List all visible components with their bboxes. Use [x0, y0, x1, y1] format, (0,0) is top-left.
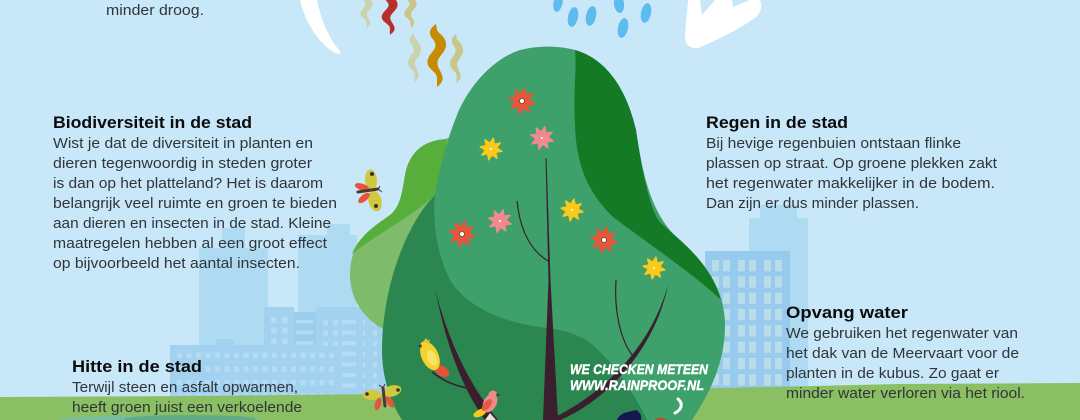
website call to action — [570, 361, 709, 393]
raindrops — [552, 0, 653, 39]
text block: biodiversiteit: Wist je dat de diversiteit in planten en — [53, 136, 313, 152]
text block: opvang water: het dak van de Meervaart voor de — [786, 346, 1019, 362]
yellow bird — [416, 338, 451, 380]
text block: regen: het regenwater makkelijker in de bodem. — [706, 176, 995, 192]
butterfly bottom — [362, 383, 403, 411]
pink bird — [472, 390, 500, 420]
text block: hitte: Terwijl steen en asfalt opwarmen, — [72, 380, 298, 396]
tree crown — [350, 47, 725, 420]
text block: regen — [706, 114, 997, 212]
text block: regen: plassen op straat. Op groene plekken zakt — [706, 156, 997, 172]
skyline right — [705, 205, 808, 395]
text block: biodiversiteit: belangrijk veel ruimte en groen te bieden — [53, 196, 337, 212]
text block: opvang water — [786, 304, 1025, 402]
smoke waves — [360, 0, 463, 87]
flowers — [447, 86, 667, 281]
text block: biodiversiteit — [53, 114, 337, 272]
figure tops at bottom of tree — [617, 399, 681, 420]
white cloud left — [300, 0, 340, 54]
text block: regen: Dan zijn er dus minder plassen. — [706, 196, 919, 212]
text block: opvang water: planten in de kubus. Zo gaat er — [786, 366, 999, 382]
text block: biodiversiteit: maatregelen hebben al een groot effect — [53, 236, 327, 252]
text block: opvang water: Opvang water — [786, 304, 909, 322]
text block: hitte: heeft groen juist een verkoelende — [72, 400, 302, 416]
skyline left — [170, 224, 390, 400]
text block: regen: Regen in de stad — [706, 114, 848, 132]
text block: biodiversiteit: is dan op het platteland? Het is daarom — [53, 176, 323, 192]
text fragment top left: minder droog. — [106, 3, 204, 19]
butterfly top — [354, 169, 384, 213]
text block: biodiversiteit: aan dieren en insecten in de stad. Kleine — [53, 216, 331, 232]
tree trunk and branches — [432, 158, 668, 420]
text block: opvang water: We gebruiken het regenwater van — [786, 326, 1018, 342]
text block: hitte: Hitte in de stad — [72, 358, 202, 376]
website call to action: WWW.RAINPROOF.NL — [570, 377, 704, 393]
website call to action: WE CHECKEN METEEN — [570, 361, 709, 377]
text block: hitte — [72, 358, 302, 416]
pond shadow — [60, 415, 260, 420]
text block: biodiversiteit: op bijvoorbeeld het aantal insecten. — [53, 256, 300, 272]
text block: biodiversiteit: dieren tegenwoordig in steden groter — [53, 156, 312, 172]
text block: regen: Bij hevige regenbuien ontstaan flinke — [706, 136, 961, 152]
ground — [0, 383, 1080, 420]
text block: biodiversiteit: Biodiversiteit in de stad — [53, 114, 252, 132]
text block: opvang water: minder water verloren via het riool. — [786, 386, 1025, 402]
white cloud right — [685, 0, 761, 48]
